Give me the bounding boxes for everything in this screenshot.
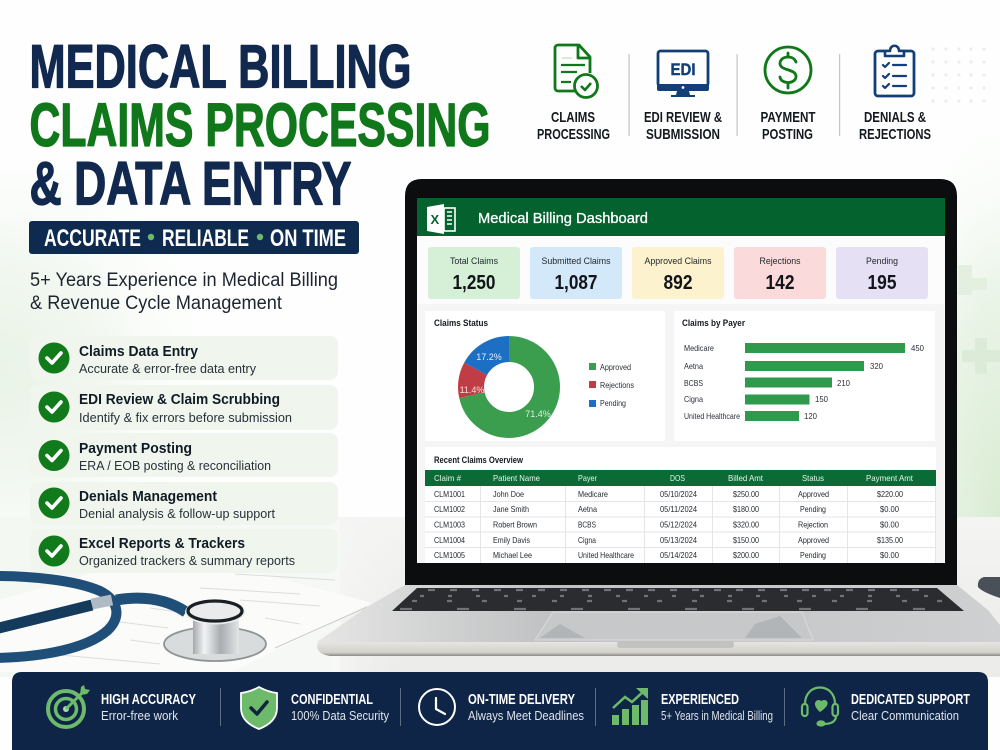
label: claims processing: PROCESSING [537, 126, 610, 143]
row 5: CLM1005 [434, 550, 465, 560]
row 3: CLM1003 [434, 520, 465, 530]
laptop base [317, 585, 1000, 656]
bar chart: 150 [815, 394, 828, 404]
donut chart [460, 349, 551, 425]
row 5: $0.00 [880, 550, 899, 560]
donut chart: 71.4% [525, 409, 551, 419]
row 2 [434, 504, 899, 514]
feature: confidential: 100% Data Security [291, 708, 389, 723]
icon: support headset [802, 688, 838, 726]
row 1 [434, 489, 903, 499]
feature: high accuracy [101, 692, 196, 723]
item: payment posting: Payment Posting [79, 441, 192, 457]
card: total claims [428, 247, 520, 299]
item: denials management: Denials Management [79, 489, 217, 505]
card: rejections: Rejections [760, 256, 801, 267]
icon: excel: X [430, 212, 440, 227]
icon: excel [427, 204, 455, 234]
row 4: Approved [798, 535, 829, 545]
row 4: CLM1004 [434, 535, 465, 545]
bar chart: Aetna [684, 361, 703, 371]
item: edi review: Identify & fix errors before submission [79, 411, 292, 425]
label: payment posting: PAYMENT [760, 109, 816, 126]
donut chart: 11.4% [460, 385, 484, 395]
divider [839, 54, 840, 136]
tagline badge [29, 221, 359, 254]
bar chart: Cigna [684, 394, 703, 404]
table header: Payment Amt [866, 473, 914, 483]
label: edi review: EDI REVIEW & [644, 109, 722, 126]
row 5: $200.00 [733, 550, 759, 560]
feature: high accuracy: HIGH ACCURACY [101, 692, 196, 708]
card: approved claims [632, 247, 724, 299]
card: pending [836, 247, 928, 299]
row 1: Approved [798, 489, 829, 499]
feature: confidential [291, 692, 389, 723]
label: edi review: SUBMISSION [646, 126, 720, 143]
feature: experienced: 5+ Years in Medical Billing [661, 708, 773, 723]
decorative dot grid [931, 47, 986, 103]
row 3 [434, 520, 899, 530]
bar chart: 450 [911, 343, 924, 353]
chestpiece [164, 600, 266, 661]
title: MEDICAL BILLING [30, 32, 412, 100]
row 3: Rejection [798, 520, 828, 530]
feature: dedicated support: Clear Communication [851, 708, 959, 723]
table header: Billed Amt [728, 473, 764, 483]
row 4 [434, 535, 903, 545]
row 1: 05/10/2024 [660, 489, 697, 499]
experience text: & Revenue Cycle Management [30, 293, 283, 314]
card: rejections: 142 [766, 272, 794, 294]
title [30, 32, 490, 218]
item: denials management: Denial analysis & follow-up support [79, 507, 276, 521]
legend: Pending [600, 398, 626, 408]
panel: services list [30, 336, 338, 573]
icon: EDI monitor [657, 51, 709, 97]
row 1: Medicare [578, 489, 608, 499]
row 4: Emily Davis [493, 535, 530, 545]
row 2: $0.00 [880, 504, 899, 514]
experience text [30, 270, 338, 314]
row 4: $135.00 [877, 535, 903, 545]
row 5 [434, 550, 899, 560]
item: edi review: EDI Review & Claim Scrubbing [79, 392, 280, 408]
label: denials and rejections: REJECTIONS [859, 126, 931, 143]
row 3: 05/12/2024 [660, 520, 697, 530]
divider [400, 688, 401, 726]
title: & DATA ENTRY [30, 150, 352, 218]
table header: Claim # [434, 473, 461, 483]
icon: shield [241, 687, 277, 729]
row 5: United Healthcare [578, 550, 634, 560]
bar chart: 210 [837, 378, 850, 388]
table header: Status [802, 473, 824, 483]
row 4: Cigna [578, 535, 596, 545]
photo: stethoscope [0, 576, 266, 661]
card: rejections [734, 247, 826, 299]
feature: on-time delivery [468, 692, 584, 723]
item: denials management [30, 482, 338, 525]
item: edi review [30, 385, 338, 430]
tagline badge: ACCURATE [44, 225, 141, 252]
bar chart: United Healthcare [684, 411, 740, 421]
panel: claims status: Claims Status [434, 318, 488, 328]
divider [220, 688, 221, 726]
row 1: CLM1001 [434, 489, 465, 499]
item: excel reports: Organized trackers & summary reports [79, 554, 295, 568]
card: total claims: 1,250 [452, 272, 496, 294]
feature: experienced [661, 692, 773, 723]
feature: confidential: CONFIDENTIAL [291, 692, 373, 708]
row 2: Pending [800, 504, 826, 514]
divider [595, 688, 596, 726]
item: payment posting: ERA / EOB posting & reconciliation [79, 459, 271, 473]
table header: Patient Name [493, 473, 540, 483]
feature: high accuracy: Error-free work [101, 708, 178, 723]
footer bar [12, 672, 988, 750]
card: approved claims: Approved Claims [644, 256, 712, 267]
KPI cards [428, 247, 928, 299]
row 1: $250.00 [733, 489, 759, 499]
icon: claims document [555, 45, 598, 98]
item: excel reports: Excel Reports & Trackers [79, 536, 245, 552]
table header: Payer [578, 473, 597, 483]
icon: target [48, 685, 90, 727]
service icons row [537, 45, 931, 143]
bar chart: BCBS [684, 378, 703, 388]
panel backdrop [418, 304, 944, 563]
legend: Rejections [600, 380, 634, 390]
panel: recent claims table: Recent Claims Overview [434, 455, 524, 465]
item: payment posting [30, 433, 338, 477]
icon: clipboard checklist [875, 46, 914, 96]
screen [417, 198, 945, 563]
icon: growth chart [612, 688, 648, 725]
photo: phone on desk [978, 577, 1000, 598]
card: pending: 195 [868, 272, 896, 294]
dashboard header: Medical Billing Dashboard [478, 210, 648, 227]
panel: claims status [425, 311, 665, 441]
row 1: $220.00 [877, 489, 903, 499]
row 2: Aetna [578, 504, 597, 514]
card: pending: Pending [866, 256, 898, 267]
row 2: CLM1002 [434, 504, 465, 514]
table header [425, 470, 936, 486]
card: submitted claims: 1,087 [554, 272, 598, 294]
row 3: BCBS [578, 520, 596, 530]
label: claims processing: CLAIMS [551, 109, 595, 126]
label: edi review [644, 109, 722, 143]
icon: dollar coin [765, 47, 811, 93]
row 4: 05/13/2024 [660, 535, 697, 545]
panel: claims by payer [674, 311, 935, 441]
item: claims data entry: Claims Data Entry [79, 344, 198, 360]
label: claims processing [537, 109, 610, 143]
row 3: $320.00 [733, 520, 759, 530]
card: submitted claims [530, 247, 622, 299]
tagline badge: ON TIME [270, 225, 346, 252]
bar chart: 120 [804, 411, 817, 421]
bar chart: 320 [870, 361, 883, 371]
row 3: Robert Brown [493, 520, 537, 530]
title: CLAIMS PROCESSING [30, 91, 490, 159]
icon: clock [419, 689, 455, 725]
label: denials and rejections [859, 109, 931, 143]
label: payment posting: POSTING [762, 126, 813, 143]
card: approved claims: 892 [664, 272, 692, 294]
row 2: Jane Smith [493, 504, 529, 514]
panel: claims by payer: Claims by Payer [682, 318, 745, 328]
row 5: 05/14/2024 [660, 550, 697, 560]
donut chart: 17.2% [476, 352, 502, 362]
tagline badge: RELIABLE [162, 225, 249, 252]
experience text: 5+ Years Experience in Medical Billing [30, 270, 338, 291]
label: denials and rejections: DENIALS & [864, 109, 926, 126]
card: total claims: Total Claims [450, 256, 498, 267]
feature: experienced: EXPERIENCED [661, 692, 739, 708]
row 5: Pending [800, 550, 826, 560]
dashboard header [417, 198, 945, 236]
row 4: $150.00 [733, 535, 759, 545]
label: payment posting [760, 109, 816, 143]
laptop bezel [405, 179, 957, 585]
laptop [317, 179, 1000, 656]
table header: DOS [670, 473, 685, 483]
panel: recent claims table [425, 447, 936, 563]
feature: on-time delivery: ON-TIME DELIVERY [468, 692, 575, 708]
card: submitted claims: Submitted Claims [542, 256, 611, 267]
item: claims data entry: Accurate & error-free data entry [79, 362, 257, 376]
legend: Approved [600, 362, 631, 372]
item: claims data entry [30, 336, 338, 380]
legend [589, 362, 634, 408]
row 2: $180.00 [733, 504, 759, 514]
feature: dedicated support [851, 692, 970, 723]
row 5: Michael Lee [493, 550, 532, 560]
table rows [434, 489, 903, 560]
divider [736, 54, 738, 136]
bar chart [684, 343, 924, 421]
divider [628, 54, 630, 136]
row 3: $0.00 [880, 520, 899, 530]
divider [784, 688, 785, 726]
icon: EDI monitor: EDI [670, 60, 696, 79]
table grid [425, 486, 936, 563]
row 1: John Doe [493, 489, 524, 499]
item: excel reports [30, 529, 338, 573]
row 2: 05/11/2024 [660, 504, 697, 514]
feature: on-time delivery: Always Meet Deadlines [468, 708, 584, 723]
bar chart: Medicare [684, 343, 714, 353]
